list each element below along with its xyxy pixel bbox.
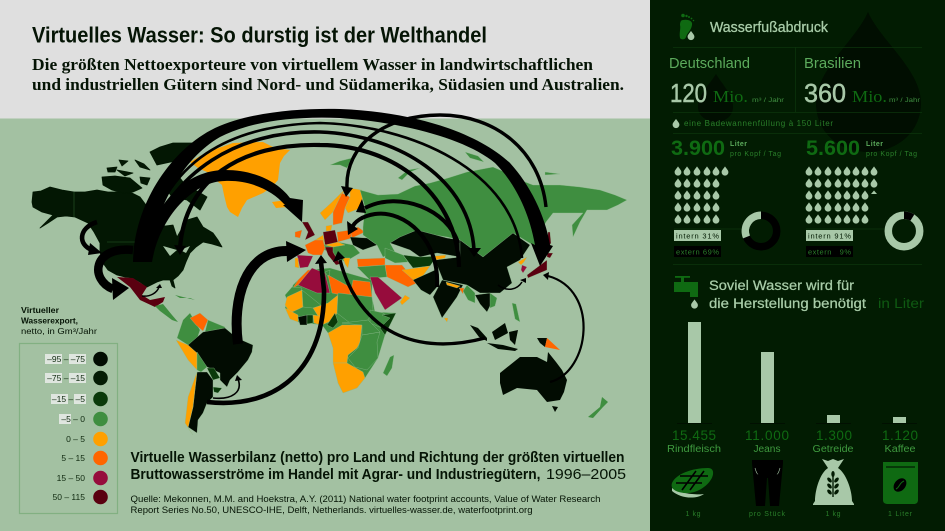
icon: steak (672, 468, 713, 498)
legend: 5 – 15 (61, 453, 85, 463)
map heading: Virtuelle Wasserbilanz (netto) pro Land und Richtung der größten virtuellen (130, 449, 624, 466)
bar chart (677, 322, 917, 424)
brasilien share labels (806, 229, 885, 257)
icon: footprint (680, 14, 694, 40)
bar: jeans (761, 352, 774, 423)
bar: rindfleisch (688, 322, 701, 423)
unit labels: 1 kg (826, 511, 841, 518)
arrow: brazil to france (237, 241, 306, 344)
icon: coffee pack (883, 462, 918, 504)
bar labels: Kaffee (884, 444, 916, 455)
big background drop (816, 12, 921, 152)
arrow: north america to japan (133, 109, 553, 266)
pictogram: drops brasilien (806, 166, 877, 224)
south america (176, 313, 253, 435)
arrow: china to finland (356, 199, 458, 243)
bar: getreide (827, 415, 840, 423)
central america and mexico (117, 277, 195, 322)
brasilien figures: 360 (804, 78, 846, 108)
production heading (709, 278, 925, 311)
brasilien per capita: Liter (866, 141, 883, 148)
bar values (672, 428, 918, 443)
icon: jeans (752, 460, 783, 506)
legend title: Wasserexport, (21, 316, 78, 326)
unit labels: 1 Liter (888, 511, 913, 518)
europe (295, 187, 365, 268)
arrow: china to north america (174, 145, 459, 267)
arrow: mexico to caribbean (142, 284, 162, 296)
deutschland share labels (674, 229, 745, 257)
legend: 0 – 5 (66, 434, 85, 444)
source note: Quelle: Mekonnen, M.M. and Hoekstra, A.Y. (2011) National water footprint accounts, Value of Water Research (130, 494, 600, 504)
bar values: 15.455 (672, 428, 716, 443)
bar labels (667, 444, 916, 455)
bar: kaffee (893, 417, 906, 423)
drop key: eine Badewannenfüllung à 150 Liter (684, 119, 833, 128)
unit labels: 1 kg (686, 511, 701, 518)
legend title: netto, in Gm³/Jahr (21, 327, 97, 336)
brasilien figures: Mio. (852, 87, 887, 106)
brasilien share labels: extern 9% (808, 248, 851, 256)
world map (32, 142, 627, 435)
bar labels: Getreide (812, 444, 854, 455)
brasilien figures (804, 56, 921, 108)
deutschland figures: 120 (670, 78, 707, 108)
map heading: 1996–2005 (546, 466, 626, 483)
deutschland figures: m³ / Jahr (752, 97, 785, 104)
icon: grain sack (813, 459, 854, 505)
legend title (21, 306, 97, 336)
unit labels: pro Stück (749, 511, 786, 518)
bar labels: Rindfleisch (667, 444, 721, 455)
arrow: usa to mexico (98, 250, 133, 300)
bar values: 1.300 (816, 428, 852, 443)
deutschland share labels: extern 69% (676, 248, 719, 256)
deutschland share labels: intern 31% (676, 232, 719, 240)
brasilien figures: m³ / Jahr (889, 97, 921, 104)
donut chart deutschland (745, 215, 777, 247)
deutschland figures: Deutschland (669, 56, 750, 72)
legend title: Virtueller (21, 306, 59, 315)
bar values: 1.120 (882, 428, 918, 443)
subtitle: Die größten Nettoexporteure von virtuellem Wasser in landwirtschaftlichen (32, 55, 594, 74)
greenland and iceland (190, 142, 290, 217)
deutschland figures: Mio. (713, 87, 748, 106)
legend (20, 344, 118, 514)
brasilien per capita: pro Kopf / Tag (866, 151, 917, 158)
deutschland per capita: Liter (730, 141, 747, 148)
arrow: north america to korea (145, 123, 522, 258)
donut chart brasilien (888, 215, 920, 247)
production heading: Soviel Wasser wird für (709, 278, 855, 293)
arrow: canada west coast (82, 222, 102, 255)
brasilien per capita: 5.600 (806, 137, 860, 160)
indonesia and oceania (470, 323, 608, 418)
footprint heading: Wasserfußabdruck (710, 20, 829, 36)
legend: –5 – 0 (61, 414, 85, 424)
source note: Report Series No.50, UNESCO-IHE, Delft, Netherlands. virtuelles-wasser.de, waterfootprint.org (130, 505, 532, 515)
brasilien figures: Brasilien (804, 56, 861, 72)
legend: –75 – –15 (47, 373, 85, 383)
subtitle (32, 55, 624, 94)
arrow: argentina to brazil (213, 375, 242, 398)
map heading: Bruttowasserströme im Handel mit Agrar- und Industriegütern, (130, 466, 540, 483)
deutschland per capita: pro Kopf / Tag (730, 151, 781, 158)
deutschland figures (669, 56, 785, 108)
deutschland per capita (671, 137, 781, 160)
subtitle: und industriellen Gütern sind Nord- und Südamerika, Südasien und Australien. (32, 75, 624, 94)
russia and asia (330, 152, 627, 322)
bar values: 11.000 (745, 428, 789, 443)
legend: 50 – 115 (53, 492, 85, 502)
legend: –95 – –75 (47, 354, 85, 364)
pictogram: drops deutschland (675, 166, 728, 224)
arrow: india to poland (347, 214, 437, 287)
north america (32, 143, 222, 288)
legend: –15 – –5 (52, 394, 85, 404)
source note (130, 494, 600, 515)
bar labels: Jeans (754, 444, 780, 455)
unit labels (686, 511, 913, 518)
legend: 15 – 50 (57, 473, 85, 483)
arrow: australia to japan (543, 272, 584, 382)
arrow: argentina to europe (207, 255, 327, 403)
small background drop (698, 74, 733, 122)
trade flow arrows (82, 109, 584, 403)
map heading (130, 449, 626, 483)
brasilien share labels: intern 91% (808, 232, 851, 240)
icon: water tap (674, 276, 698, 309)
panel: water footprint and production (650, 0, 945, 531)
arrow: russia to scandinavia (341, 115, 546, 207)
deutschland per capita: 3.900 (671, 137, 725, 160)
arrow: canada to britain (143, 170, 303, 262)
arrow: china to japan (498, 278, 526, 289)
africa (285, 268, 396, 393)
production heading: die Herstellung benötigt (709, 296, 866, 311)
arrow: indonesia to italy (333, 251, 485, 344)
title: Virtuelles Wasser: So durstig ist der Welthandel (32, 22, 487, 48)
production heading: in Liter (878, 296, 925, 311)
arrow: north america to china (145, 132, 481, 257)
brasilien per capita (806, 137, 917, 160)
